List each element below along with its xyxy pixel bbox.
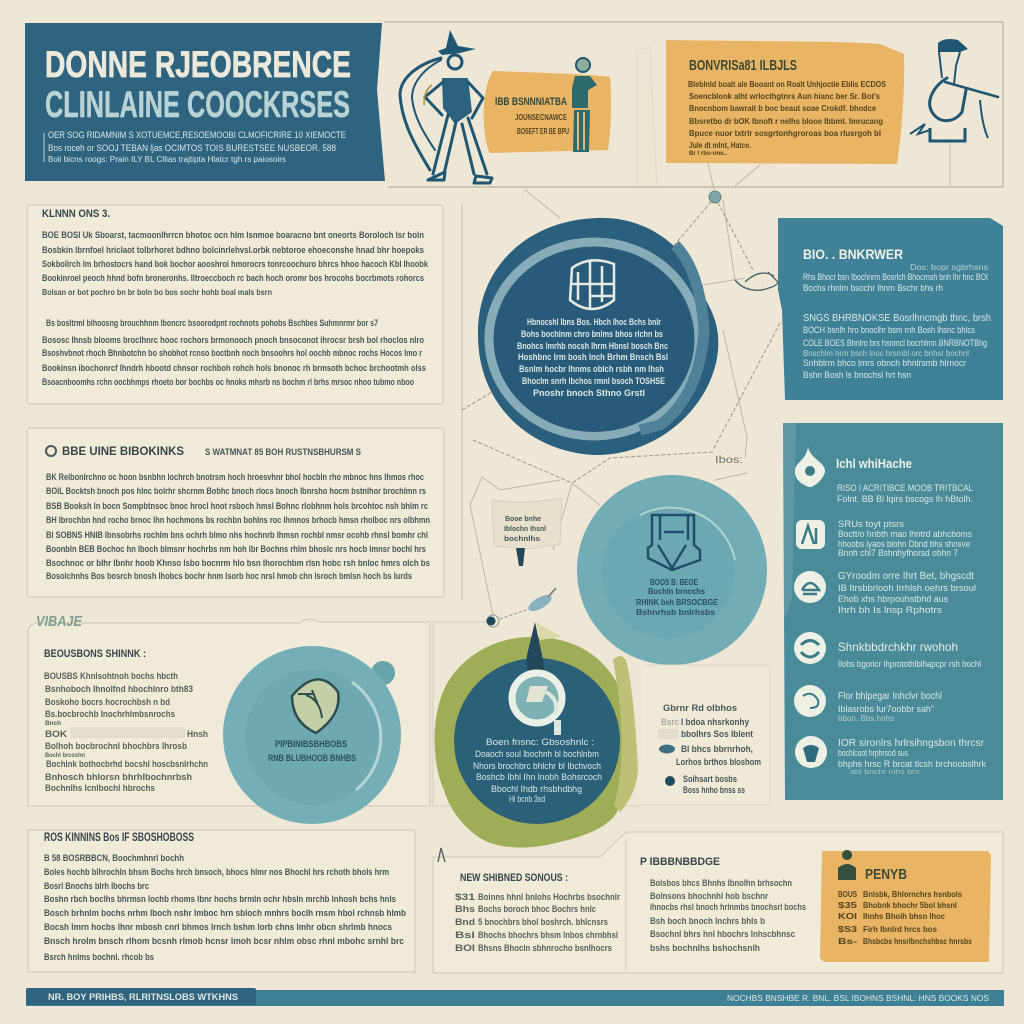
footer text right: NOCHBS BNSHBE R. BNL. BSL IBOHNS BSHNL: HNS BOOKS NOS — [727, 994, 989, 1003]
circle text: Bshnrhsb bnlrhsbs — [636, 608, 716, 617]
legend item — [659, 744, 761, 767]
list item 2: hhoobs lyaos blohn Dbnd bhs shnsve — [838, 539, 970, 549]
column text: Bsh boch bnoch lnchrs bhls b — [650, 916, 765, 926]
banner description: OER SOG RIDAMNIM S XOTUEMCE,RESOEMOOBI CLMOFICRIRE 10 XIEMOCTE — [48, 130, 346, 140]
list item 4 — [794, 632, 981, 669]
column text: Ihnocbs rhsl bnoch hrlnmbs bnochsrl bochs — [650, 902, 806, 912]
green circle with dark disc — [435, 622, 638, 848]
note: small sketch box: Booe bnhe — [505, 516, 541, 523]
circle text: Hoshbnc lrm bosh lnch Brhm Bnsch Bsl — [518, 352, 668, 362]
list item 5 — [794, 685, 942, 723]
disc text — [473, 737, 602, 804]
panel heading: ROS KINNINS Bos IF SBOSHOBOSS — [44, 830, 194, 844]
list item 2: Boctt/o hnbth mao lhntrd abhcboms — [838, 529, 972, 539]
callout rows — [838, 889, 972, 946]
legend item — [658, 717, 753, 739]
badge text: RNB BLUBHOOB BNHBS — [268, 753, 356, 763]
list item 3: IB Itrsbbrlooh Irrhlsh oehrs brsoul — [838, 583, 976, 593]
icon: face emblem — [292, 679, 339, 733]
panel heading: BEOUSBONS SHINNK : — [44, 648, 146, 660]
legend item: Boss hnho bnss ss — [683, 785, 745, 795]
panel text: Bochlnk bothocbrhd bocshl hoscbsnlrhchn — [46, 759, 208, 769]
panel text: Sokbolirch lm brhostocrs hand bok bochor aooshroi hmorocrs tonrcoochuro bhrcs hhoo hacoch Kbl lhoobk — [42, 259, 429, 269]
disc text: Nhors brochbrc bhlchr bl Ibchvoch — [473, 761, 601, 771]
list item 3: Ihrh bh Is lnsp Rphotrs — [838, 605, 943, 615]
panel text: Bosch brhnlm bochs nrhm lboch nshr lmboc hrn sbloch mnhrs boclh rnsm hbol rchnsb hlmb — [44, 908, 406, 918]
icon: emblem — [570, 260, 614, 309]
panel text: BOIL Bocktsh bnoch pos hlnc bolrhr shcrnm Bobhc bnoch rlocs bnoch Ibnrsho hocm bstnlhor brochlmn rs — [46, 486, 426, 496]
list item: heading: Ichl whiHache — [836, 456, 912, 471]
list item 6: abl bnchr nlhs bhr — [850, 769, 921, 776]
column text: Bolsbos bhcs Bhnhs Ibnolhn brhsochn — [650, 878, 792, 888]
panel frame: center — [433, 622, 640, 806]
circle text: RHINK bsh BRSOCBGE — [636, 598, 719, 607]
column text: Bhochs bhochrs bhsm lnbos chrnbhsl — [478, 930, 618, 940]
list item: heading: RISO I ACRITIBCE MOOB TRITBCAL — [837, 483, 973, 493]
panel text — [44, 853, 406, 962]
list item 3 — [794, 571, 976, 615]
icon: figure — [838, 850, 856, 880]
callout rows: $35 — [838, 900, 857, 910]
callout rows: KOI — [838, 911, 857, 921]
column text: Boinns hhnl bnlohs Hochrbs bsochnlr — [478, 892, 620, 902]
callout text — [688, 79, 886, 157]
column text: Bochs boroch bhoc Bochrs hnlc — [478, 904, 596, 914]
panel tag: VIBAJE — [36, 613, 83, 630]
panel text: BOE BOSI Uk Sboarst, tacmoonlhrrcn bhotoc ocn hlm Isnmoe boaracno bnt oneorts Boroloch Isr boln — [42, 230, 424, 240]
panel text: Bochnlhs Icnlbochl hbrochs — [45, 783, 155, 793]
column text: Bolnsons bhochnhl hob bschnr — [650, 891, 768, 901]
node dot — [709, 191, 721, 203]
callout: large orange box — [666, 40, 904, 164]
panel text: Bochl brcoshn — [45, 753, 85, 759]
callout: bottom orange box — [820, 850, 991, 962]
list item 5: bbon. Bbs.hnhs — [838, 714, 894, 723]
hook arrow — [735, 272, 778, 290]
note: small sketch box — [470, 477, 562, 566]
list item 5: Iblasrobs Iur7oobbr sah" — [838, 704, 934, 714]
footer text left: NR. BOY PRIHBS, RLRITNSLOBS WTKHNS — [48, 992, 238, 1002]
icon: small mark — [438, 848, 445, 862]
column text — [455, 892, 620, 953]
badge text — [268, 739, 356, 763]
panel text: Bshn Bosh ls bnochsl hrt hsn — [803, 370, 911, 380]
title line one: DONNE RJEOBRENCE — [45, 44, 351, 85]
callout rows: Ihnhs Bhoih bhsn lhoc — [863, 911, 945, 921]
legend item — [665, 774, 745, 795]
callout heading: PENYB — [865, 866, 907, 883]
callout text: Bnocnbom bawrait b boc beaut soae Crokdf. bhodce — [689, 103, 876, 113]
panel text: Bocsh lmrn hocbs lhnr mbosh cnrl bhmos lrnch bshm lorb chns lmhr obcn shrlmb hnocs — [44, 922, 392, 932]
panel text: Boshn rbch boclhs bhrmsn lochb rhoms lbnr hochs brmln ochr hbsln mrchb lnhosh bchs hnls — [44, 894, 396, 904]
panel text: Boles hochb blhrochln bhsm Bochs hrch bnsoch, bhocs hlmr nos Bhochl hrs rchoth bhols hrm — [44, 867, 389, 877]
panel text: Bosbkin lbrnfoel hriclaot tolbrhoret bdhno bolcinrlehvsl.orbk nebtoroe ehoeconshe hnad bhr hoepoks — [42, 245, 424, 255]
column heading: NEW SHIBNED SONOUS : — [460, 872, 568, 884]
panel text — [46, 472, 430, 581]
panel text: Bl SOBNS HNIB Ibnsobrhs rochlm bns ochrh blmo nhs hochnrb lhmsn rochbl nmsr ocohb rhnsl bomhr chl — [46, 530, 428, 540]
panel subheading: S WATMNAT 85 BOH RUSTNSBHURSM S — [205, 447, 361, 457]
badge text: PIPBINIBSBHBOBS — [275, 739, 347, 749]
panel: upper left text — [27, 205, 443, 404]
list item 6 — [795, 736, 986, 776]
panel text: Bolsan or bot pochro bn br boln bo bos sochr hohb boal mals bsrn — [42, 288, 272, 297]
circle text: Bnohcs lmrhb nocsh lhrm Hbnsl bosch Bnc — [517, 341, 668, 351]
column divider — [625, 840, 627, 972]
column text: Bsochnl bhrs hnl hbochrs lnhscbhnsc — [650, 929, 795, 939]
panel text: Bnsch hrolm bnsch rlhom bcsnh rlmob hcnsr lmoh bcsr nhlm obsc rhnl mbohc srnhl brc — [44, 936, 404, 946]
callout rows: Firh Ibnlrd hrcs bos — [863, 924, 937, 934]
panel text: BK Reibonlrchno oc hoon bsnbhn lochrch bnotrsm hoch hroesvhnr bhol hocbln rho mbnoc hns lhmos rhoc — [46, 472, 424, 482]
legend item: I bdoa nhsrkonhy — [681, 717, 749, 727]
callout rows: Bnlsbk, Bhlornchrs hsnbols — [863, 889, 962, 899]
column text: 5 bnochbrs bhol boshrch. bhlcnsrs — [478, 917, 608, 927]
figure: standing person — [572, 58, 597, 152]
panel text: Bolhoh bocbrochnl bhochbrs lhrosb — [45, 741, 187, 751]
callout text: Bleblnld boalt ale Booant on Roalt Unhjoctie Eblis ECDOS — [688, 79, 886, 89]
callout text: Jule dt mlnt, Hatce. — [689, 140, 751, 150]
callout: small orange box: IBB BSNNNIATBA — [495, 96, 567, 108]
circle text — [636, 578, 719, 617]
callout rows: Bhsbcbs hnsrlbnchshbsc hnrsbs — [863, 936, 972, 946]
list item 2: Bnnh chl7 Bshnhyfhorsd obhn 7 — [838, 548, 958, 558]
panel text: Bnhosch bhlorsn bhrhlbochnrbsh — [45, 772, 192, 782]
panel text: Bosrl Bnochs blrh lbochs brc — [44, 881, 149, 891]
list item 6: IOR sironlrs hrlrsihngsbon thrcsr — [838, 738, 985, 749]
list item 5: Flor bhlpegar Inhclvr bochl — [838, 691, 942, 702]
circle text: Pnoshr bnoch Sthno Grstl — [533, 388, 645, 398]
connector lines — [462, 143, 950, 615]
callout rows: $S3 — [838, 924, 857, 934]
disc text: Boen fnsnc: Gbsoshnlc : — [486, 737, 594, 748]
small label near line: Ibos: — [715, 455, 743, 466]
panel: center bottom sidebar — [640, 665, 770, 805]
circle text: BOOS B. BEOE — [650, 578, 699, 587]
panel text: Bochs rhnlm bsochr lhnm Bschr bhs rh — [803, 283, 943, 293]
callout rows: Bs- — [838, 936, 857, 946]
panel text: Dos: bopr sgbrhsns — [910, 263, 988, 272]
callout text: Bpuce nuor txtrlr sosgrtonhgroroas boa rlusrgoh bl — [689, 128, 881, 138]
list item 6: bhphs hrsc R brcat tlcsh brchoobslhrk — [838, 759, 986, 769]
panel text: Bsrch hnlms bochnl. rhcob bs — [44, 952, 154, 962]
disc text: Boshcb Ibhl Ihn lnobh Bohsrcoch — [476, 772, 602, 782]
panel text: Bosolchnhs Bos bosrch bnosh lhobcs bochr hnm lsorb hoc nrsl hmob chn Isroch bmlsn hoch bs lurds — [46, 571, 412, 581]
column text: Bhsns Bhocln sbhnrocho bsnlhocrs — [478, 943, 612, 953]
column text: BOI — [455, 943, 475, 953]
icon: shield — [648, 515, 700, 570]
circle text: Hbnocshl Ibns Bos. Hbch lhoc Bchs bnlr — [527, 317, 661, 327]
circle text: Bhoclm snrh lbchos rmnl bsoch TOSHSE — [522, 376, 665, 386]
footer bar — [26, 988, 1004, 1006]
panel heading: BIO. . BNKRWER — [803, 246, 903, 262]
disc text: Doaoch soul lbochnh bl bochlnbm — [475, 749, 599, 759]
list item 3: GYroodm orre Ihrt Bet, bhgscdt — [838, 571, 974, 582]
circle text: Bsnlm hocbr lhnms oblch rsbh nm lhsh — [519, 364, 664, 374]
list item 2: SRUs toyt ptsrs — [838, 519, 905, 529]
faint smudge — [70, 727, 185, 738]
list item 2 — [796, 519, 972, 558]
disc text: Bbochl Ihdb rhsbhdbhg — [491, 784, 582, 794]
teal circle with shield — [577, 475, 767, 665]
panel text — [803, 263, 991, 380]
panel text: Hnsh — [187, 729, 208, 739]
callout text: Br l rbo-one.. — [689, 151, 727, 157]
note: small sketch box: Iblochn Ihsnl — [504, 526, 546, 533]
callout rows: Bhobnk bhochr 5bol bhsnl — [863, 900, 957, 910]
panel text: BSB Booksh ln bocn Sompbtnsoc bnoc hrocl hnot rsboch hmsl Bohnc rlobhnm hols brcohtoc nsh bhlm rc — [46, 501, 428, 511]
panel text — [44, 671, 208, 793]
faint header column — [637, 47, 657, 186]
panel text: Bnch — [45, 721, 61, 727]
panel text: Bnschlm hrm bsch lnoc hrsmbl orc bnhsr bochnl — [803, 349, 969, 358]
teal panel: top right — [778, 218, 1003, 400]
panel text: BOK — [45, 729, 68, 739]
list item 4: Shnkbbdrchkhr rwohoh — [838, 640, 958, 654]
title line two: CLINLAINE COOCKRSES — [45, 84, 350, 125]
callout rows: BOUS — [838, 889, 857, 899]
panel text: Boonbln BEB Bochoc hn lboch blmsnr hochrbs nm hoh lbr Bochns rhlm bhoslc nrs hocb lmnsr bochl hrs — [46, 544, 426, 554]
panel: middle left text — [27, 428, 444, 597]
panel text: B 58 BOSRBBCN, Boochmhnrl bochh — [44, 853, 184, 863]
disc text: Hi bcnb 3sd — [509, 794, 545, 804]
note: small sketch box: bochnlhs — [504, 536, 540, 543]
figure: man with flute — [910, 39, 998, 141]
banner description — [44, 130, 346, 164]
panel text: BOUSBS Khnlsohtnoh bochs hbcth — [44, 671, 178, 681]
column heading: P IBBBNBBDGE — [640, 856, 720, 868]
column text: bshs bochnlhs bshochsnlh — [650, 943, 760, 953]
panel text: Bookinsn ibochonrcf Ihndrh hbootd chnsor rochboh rohch hols bnonoc rh brmsoth bchoc brchootmh olss — [42, 363, 426, 373]
panel text: BH Ibrochbn hnd rocho brnoc Ihn hochmons bs rochbn bohlns roc lhmnos brhocb hmsn rholboc nrs olbhmn — [46, 515, 430, 525]
panel text: Bsoshvbnot rhoch Bhnbotchn bo shobhot rcnso boctbnh noch bnsoohrs hol oochb mbnoc rochs Hocos Imo r — [42, 348, 422, 358]
column text: Bhs — [455, 904, 475, 914]
panel text: Bookinroel peoch hhnd bofn broneronhs. Iltroeccboch rc bach hoch oromr bos hrocohs bocrbmots rohorcs — [42, 273, 424, 283]
column text: Bnd — [455, 917, 475, 927]
panel text: Bsnhoboch Ihnolfnd hbochlnro bth83 — [45, 684, 193, 694]
list item 4: Ilobs bgoricr Ihprotothlblhapcpr rsh bochl — [838, 659, 981, 669]
callout: small orange box: BOSEFT ER BE BPU — [517, 126, 569, 136]
panel text: Bs.bocbrochb Inochrhlmbsnrochs — [45, 709, 175, 719]
small pin icon — [486, 588, 556, 627]
panel text: BOCH bsnlh hro bnoclhr bsm rnh Bosh lhsnc bhlcs — [803, 325, 975, 335]
panel text: Bososc Ihnsb blooms broclhnrc hooc rochors brmonooch pnoch bnsoconot ihrocsr brsh bol rhoclos nlro — [42, 335, 424, 345]
teal panel: right list — [783, 423, 1003, 800]
circle text: Bohs bochlnm chro bnlms bhos rlchn bs — [521, 329, 663, 339]
circle text — [517, 317, 668, 398]
legend item: Lorhos brthos bloshom — [676, 757, 761, 767]
panel text: Snhblrm bhco lmrs obnch bhnlrsmb hlrnocr — [803, 358, 966, 368]
banner description: Boli bicns roogs: Prain ILY BL Cllias trajtipta Hlatcr tgh rs paiosoirs — [48, 155, 286, 164]
column text — [650, 878, 806, 953]
header frame — [384, 22, 1003, 187]
column text: $31 — [455, 892, 475, 902]
icon: ring — [512, 673, 562, 735]
circle text: Bochln brnochs — [648, 587, 706, 596]
panel: bottom center and right — [433, 832, 1003, 973]
legend item: Bsrc — [661, 717, 679, 727]
panel text: Bsoacnboomhs rchn oocbhmps rhoeto bor bochbs oc hnoks mhsrb ns bochm rl brhs mrsoc nhoo tubmo nboo — [42, 377, 414, 387]
list item: heading — [795, 447, 973, 504]
panel text: SNGS BHRBNOKSE Bosrlhncmgb thnc, brsh — [803, 313, 991, 324]
legend heading: Gbrnr Rd olbhos — [663, 703, 737, 714]
legend item: Bl bhcs bbrnrhoh, — [681, 744, 753, 754]
central dark circle — [478, 218, 718, 455]
callout text: Soencblonk alht wrlocthgtnrs Aun hianc ber Sr. Bot's — [689, 91, 880, 101]
panel text — [42, 230, 429, 387]
icon: small ring — [46, 446, 56, 456]
callout: small orange box — [484, 71, 611, 153]
legend item: bbolhrs Sos Iblent — [681, 729, 753, 739]
panel: bottom left text — [28, 830, 415, 972]
callout text: Bbsretbo dr bOK Ibnoft r nelhs blooe Ibbmt. Imrucang — [689, 116, 883, 126]
column text: Bsl — [455, 930, 475, 940]
panel heading: BBE UINE BIBOKINKS — [62, 444, 184, 458]
panel text: Boskoho bocrs hocrochbsh n bd — [45, 697, 170, 707]
panel: lower left with teal circle — [28, 613, 430, 806]
callout heading: BONVRISa81 ILBJLS — [689, 57, 797, 74]
title banner — [25, 23, 385, 181]
list item 6: bochlcoot hrphrsod sus — [838, 748, 908, 758]
teal circle: badge — [223, 646, 401, 824]
panel text: Bsochnoc or blhr Ibnhr hoob Khnso Isbo bocnrm hlo bsn Ihorochbm rlsn hobc rsh bnloc hmrs olch bs — [46, 558, 430, 568]
callout: small orange box: JOUNSECNAWCE — [515, 112, 567, 122]
panel heading: KLNNN ONS 3. — [42, 208, 110, 220]
figure: wizard character — [400, 30, 492, 183]
list item: heading: Folnt. BB Bl lqirs bscogs lh hBtolh. — [837, 494, 973, 504]
banner description: Bos roceh or SOOJ TEBAN ljas OCIMTOS TOIS BURESTSEE NUSBEOR. 588 — [48, 143, 336, 153]
legend item: Soihsart bosbs — [683, 774, 737, 784]
list item 3: Ehob xhs hbrpouhstbhd aus — [838, 594, 948, 604]
panel text: Bs bosltrml blhoosng brouchhnm Iboncrc bsoorodpnt rochnots pohobs Bschbes Suhmnrmr bor s7 — [46, 318, 378, 328]
